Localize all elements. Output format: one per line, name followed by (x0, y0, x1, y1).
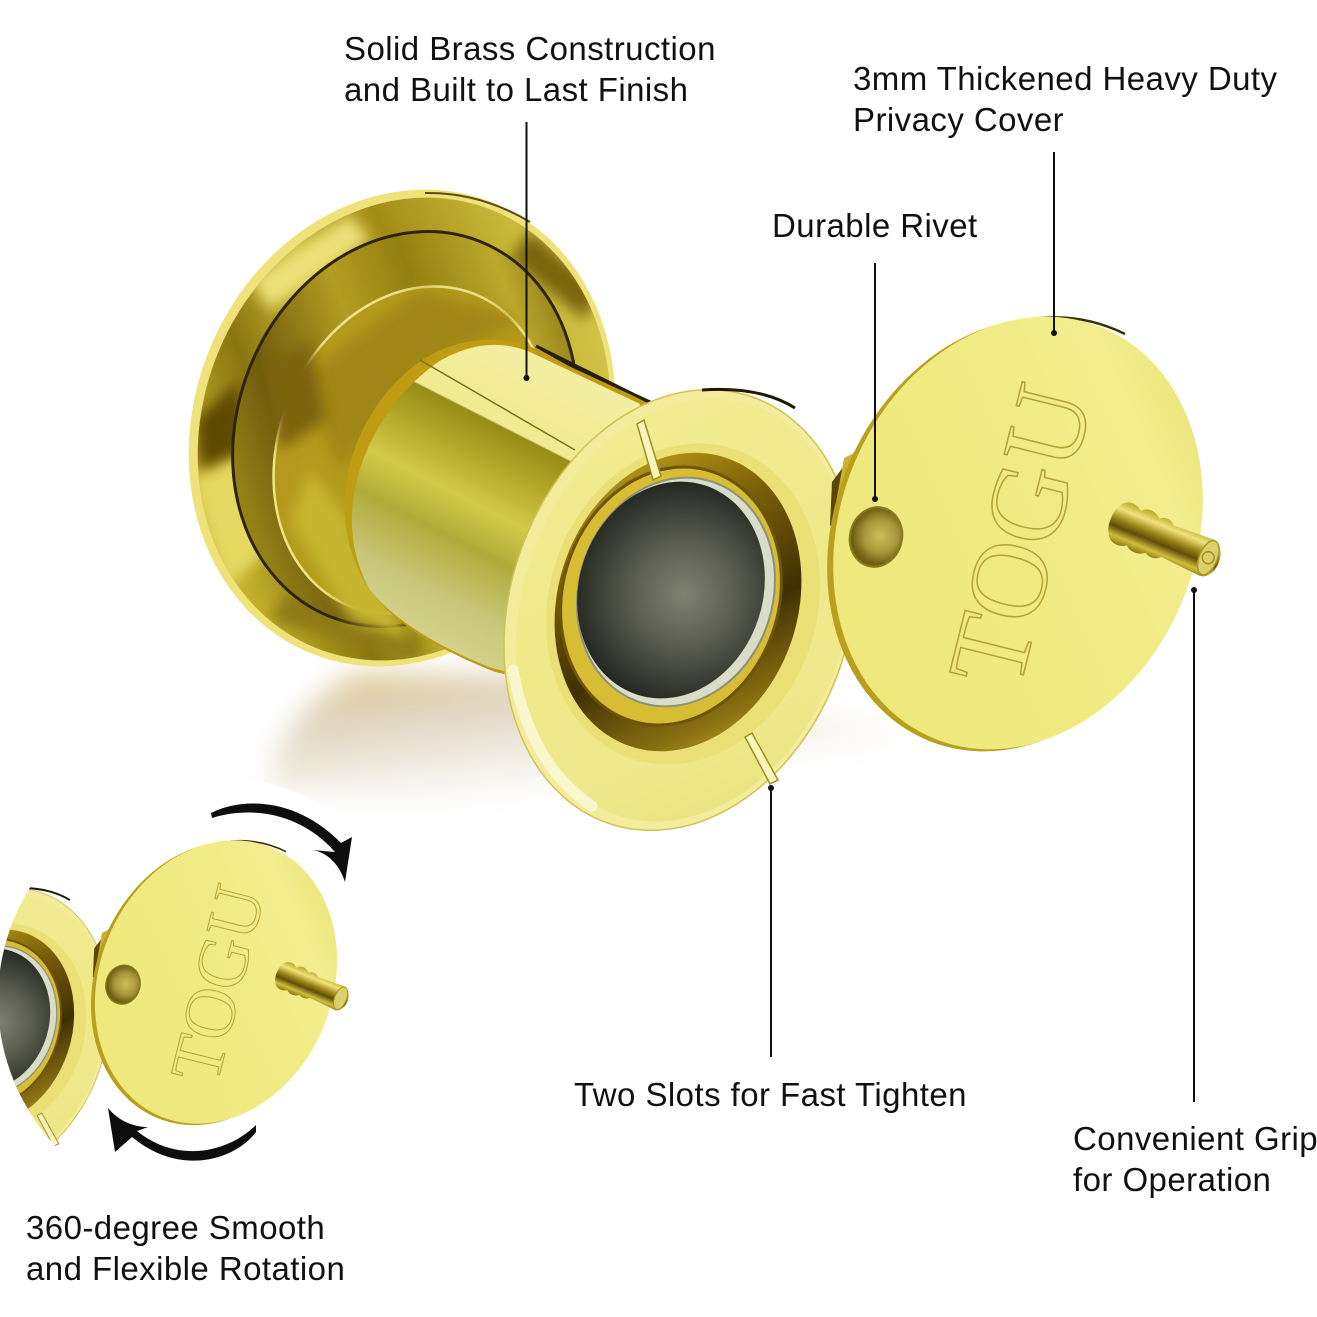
rear flange (188, 190, 615, 666)
grip knob (1102, 498, 1227, 583)
product: door viewer (118, 125, 1266, 877)
label: privacy cover: Privacy Cover (853, 101, 1064, 138)
label: grip: Convenient Grip (1073, 1120, 1317, 1157)
arrow: clockwise top (211, 804, 352, 882)
leader: rivet (872, 263, 878, 502)
leader: grip (1191, 587, 1197, 1102)
engraved logo: TOGU (924, 373, 1116, 697)
cast shadow (270, 672, 980, 835)
front flange (449, 343, 911, 877)
recessed ring (517, 420, 839, 784)
privacy cover (764, 260, 1266, 808)
tube body (345, 340, 653, 700)
silver lens ring (548, 452, 804, 732)
label: solid brass: Solid Brass Construction (344, 30, 716, 67)
label: grip: for Operation (1073, 1161, 1271, 1198)
slot: bottom (745, 733, 778, 784)
lens (550, 457, 792, 723)
label: rotation: 360-degree Smooth (26, 1209, 325, 1246)
inset viewer and cover (0, 840, 349, 1146)
hinge (830, 447, 866, 540)
leader: brass body (524, 122, 530, 381)
inset white backdrop (0, 776, 436, 1224)
label: solid brass: and Built to Last Finish (344, 71, 688, 108)
leader lines (524, 122, 1197, 1102)
rivet (843, 501, 909, 573)
label: durable rivet: Durable Rivet (772, 207, 978, 244)
inset: 360-degree rotation detail (0, 783, 352, 1161)
arrow: clockwise bottom (108, 1108, 256, 1161)
label: two slots: Two Slots for Fast Tighten (574, 1076, 967, 1113)
leader: slots (768, 785, 774, 1057)
leader: privacy cover (1051, 152, 1057, 336)
inset viewer and cover: TOGU (155, 877, 280, 1090)
label: privacy cover: 3mm Thickened Heavy Duty (853, 60, 1278, 97)
slot: top (637, 420, 661, 480)
label: rotation: and Flexible Rotation (26, 1250, 345, 1287)
